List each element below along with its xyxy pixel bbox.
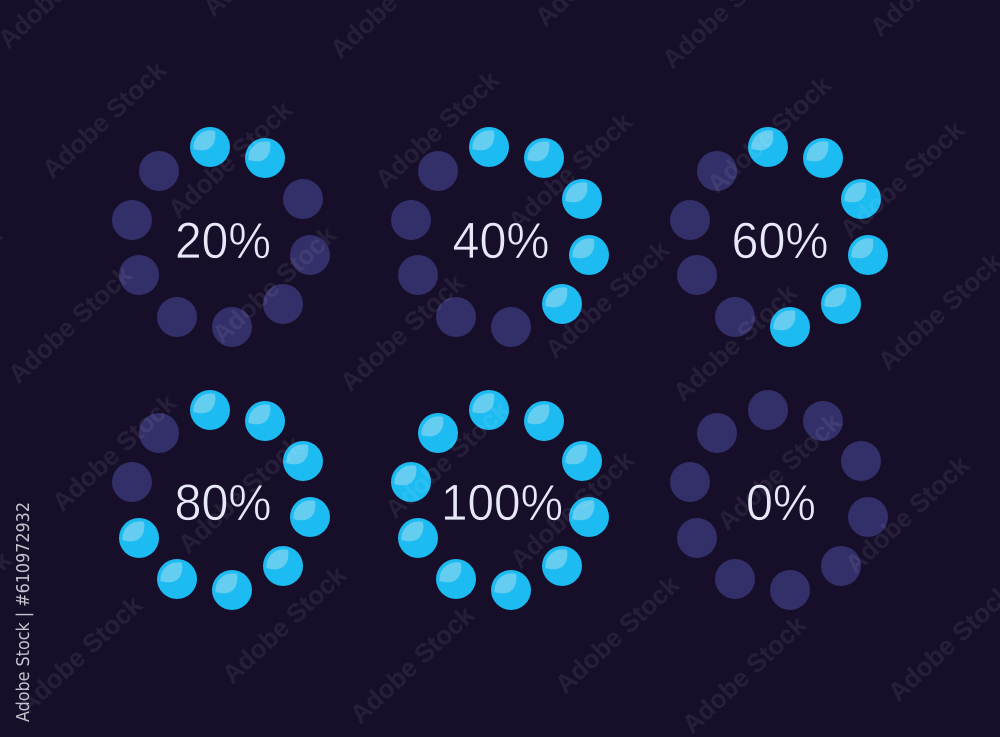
panel: 80% loader xyxy=(112,390,330,610)
stock watermarks: Adobe Stock xyxy=(334,267,470,397)
stock watermarks: Adobe Stock xyxy=(172,429,308,559)
panel: 100% loader: 100% xyxy=(441,474,563,531)
stock watermarks: Adobe Stock xyxy=(344,599,480,729)
panel: 20% loader: 20% xyxy=(175,212,271,269)
stock watermarks: Adobe Stock xyxy=(379,394,515,524)
stock watermarks: Adobe Stock xyxy=(504,444,640,574)
panel: 60% loader xyxy=(670,127,888,347)
stock watermarks: Adobe Stock xyxy=(667,277,803,407)
stock watermarks: Adobe Stock xyxy=(2,259,138,389)
stock watermarks: Adobe Stock xyxy=(36,54,172,184)
stock watermarks: Adobe Stock xyxy=(839,449,975,579)
stock watermarks: Adobe Stock xyxy=(701,69,837,199)
side credit text: Adobe Stock | #610972932 xyxy=(13,502,34,722)
panel: 40% loader xyxy=(391,127,609,347)
panel: 60% loader: 60% xyxy=(732,212,828,269)
stock watermarks: Adobe Stock xyxy=(711,406,847,536)
stock watermarks: Adobe Stock xyxy=(46,387,182,517)
stock watermarks: Adobe Stock xyxy=(834,114,970,244)
panel: 100% loader xyxy=(391,390,609,610)
stock watermarks: Adobe Stock xyxy=(502,106,638,236)
stock watermarks: Adobe Stock xyxy=(676,609,812,737)
panel: 20% loader xyxy=(112,127,330,347)
panel: 0% loader: 0% xyxy=(746,474,816,531)
stock watermarks: Adobe Stock xyxy=(206,219,342,349)
panel: 0% loader xyxy=(670,390,888,610)
stock watermarks: Adobe Stock xyxy=(12,589,148,719)
panel: 40% loader: 40% xyxy=(452,212,550,269)
stock watermarks: Adobe Stock xyxy=(539,234,675,364)
panel: 80% loader: 80% xyxy=(174,474,272,531)
stock watermarks: Adobe Stock xyxy=(216,559,352,689)
stock watermarks: Adobe Stock xyxy=(162,94,298,224)
stock watermarks: Adobe Stock xyxy=(369,64,505,194)
stock watermarks: Adobe Stock xyxy=(549,569,685,699)
